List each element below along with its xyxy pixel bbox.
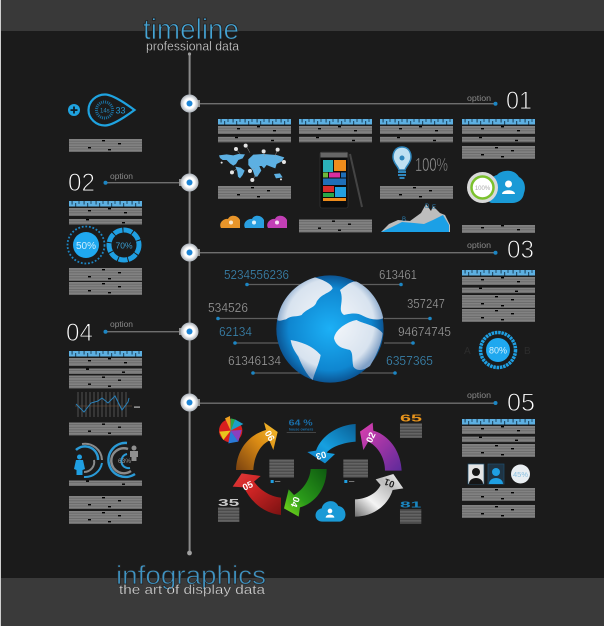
line chart xyxy=(75,392,140,417)
globe labels and leader lines: 61346134 xyxy=(228,354,281,368)
icon: light bulb xyxy=(393,147,411,179)
center text left xyxy=(269,459,294,483)
title: timeline xyxy=(143,14,239,46)
radial: man 63% xyxy=(108,443,138,477)
icon: cloud with person xyxy=(487,171,525,203)
panel: column 04 xyxy=(69,351,142,524)
connector 03: 03 xyxy=(507,236,534,264)
icon: cloud person xyxy=(316,501,345,522)
stat 35 xyxy=(218,498,240,522)
title: professional data xyxy=(146,40,239,54)
arrow 05 xyxy=(233,473,281,515)
gauge 100%: 100% xyxy=(475,186,491,192)
gauge 80% xyxy=(464,332,531,368)
vertical timeline xyxy=(187,52,192,555)
icon: pie chart xyxy=(219,416,243,443)
connector 04: option xyxy=(110,320,133,329)
arrow 03 xyxy=(307,424,356,463)
panel: column 03 xyxy=(462,270,535,368)
arrow 01 xyxy=(355,474,403,517)
connector 04: 04 xyxy=(66,319,93,347)
gauge 80%: A xyxy=(464,346,471,357)
globe labels and leader lines: 6357365 xyxy=(386,354,433,368)
connector 05: 05 xyxy=(507,389,535,417)
connector 02: 02 xyxy=(68,169,95,197)
icon: globe xyxy=(276,275,384,383)
stat: 64% house owners xyxy=(287,418,316,433)
timeline nodes xyxy=(179,94,200,412)
panel: column 05 xyxy=(462,419,535,518)
panel: column D cloud gauge xyxy=(462,119,535,233)
arrow 02 xyxy=(360,423,402,471)
gauge 50%: 50% xyxy=(76,241,96,252)
arrow 06: 06 xyxy=(263,429,277,443)
footer title: the art of display data xyxy=(119,582,266,597)
area chart xyxy=(381,204,450,232)
gauge 80%: 80% xyxy=(489,346,507,356)
stat 65: 65 xyxy=(400,414,423,425)
icon: profile dark xyxy=(468,464,484,484)
globe labels and leader lines: 613461 xyxy=(379,268,417,282)
panel: circular arrows xyxy=(218,414,423,524)
small cloud icons xyxy=(220,216,287,228)
connector 05: option xyxy=(467,391,491,400)
area chart: D xyxy=(425,204,430,210)
center text right xyxy=(343,459,368,483)
icon: world map xyxy=(219,144,286,182)
gauge 70%: 70% xyxy=(115,240,133,250)
icon: smartphone xyxy=(320,152,362,208)
gauge 45%: 45% xyxy=(513,470,528,479)
panel: column C bulb xyxy=(380,119,453,232)
connector 03: option xyxy=(467,241,491,250)
stat: 100%: 100% xyxy=(415,155,448,175)
connector 01: option xyxy=(467,94,491,103)
area chart: E xyxy=(432,205,436,211)
globe labels and leader lines: 94674745 xyxy=(398,325,451,339)
connector 05 xyxy=(197,389,535,417)
icon: profile blue xyxy=(488,464,504,484)
arrow 03: 03 xyxy=(315,449,327,462)
globe labels and leader lines: 357247 xyxy=(407,297,445,311)
arrow 06 xyxy=(236,422,278,470)
arrow 05: 05 xyxy=(241,479,255,493)
stat 81: 81 xyxy=(400,499,422,509)
arrow 02: 02 xyxy=(364,431,378,444)
globe labels and leader lines: 5234556236 xyxy=(224,268,289,282)
icon: drop gauge: 14s xyxy=(100,108,110,114)
arrow 04 xyxy=(284,469,327,517)
radial: man 63%: 63% xyxy=(118,458,131,465)
icon: drop gauge xyxy=(88,94,134,126)
gauge 80%: B xyxy=(524,346,531,357)
globe labels and leader lines xyxy=(208,268,451,375)
text block xyxy=(69,139,142,152)
connector 02: option xyxy=(110,172,133,181)
stat 81 xyxy=(400,499,422,524)
panel: column B phone xyxy=(299,119,372,232)
connector 04 xyxy=(66,319,180,347)
arrow 04: 04 xyxy=(288,495,301,509)
footer title: infographics xyxy=(116,560,266,590)
stat 65 xyxy=(400,414,423,438)
connector 02 xyxy=(68,169,180,197)
icon: plus button xyxy=(68,104,80,116)
panel: column A world map xyxy=(218,119,291,199)
icon: drop gauge: 33 xyxy=(116,106,126,116)
radial: woman xyxy=(74,444,102,477)
arrow 01: 01 xyxy=(383,477,396,489)
connector 03 xyxy=(197,236,534,264)
stat: 64% house owners: house owners xyxy=(289,428,313,432)
connector 01: 01 xyxy=(506,87,532,115)
globe labels and leader lines: 534526 xyxy=(208,301,248,315)
stat 35: 35 xyxy=(218,498,240,509)
area chart: B xyxy=(402,217,406,223)
stat: 64% house owners: 64 % xyxy=(289,418,313,427)
connector 01 xyxy=(197,87,532,115)
panel: column 02 xyxy=(68,201,142,295)
globe labels and leader lines: 62134 xyxy=(219,325,252,339)
